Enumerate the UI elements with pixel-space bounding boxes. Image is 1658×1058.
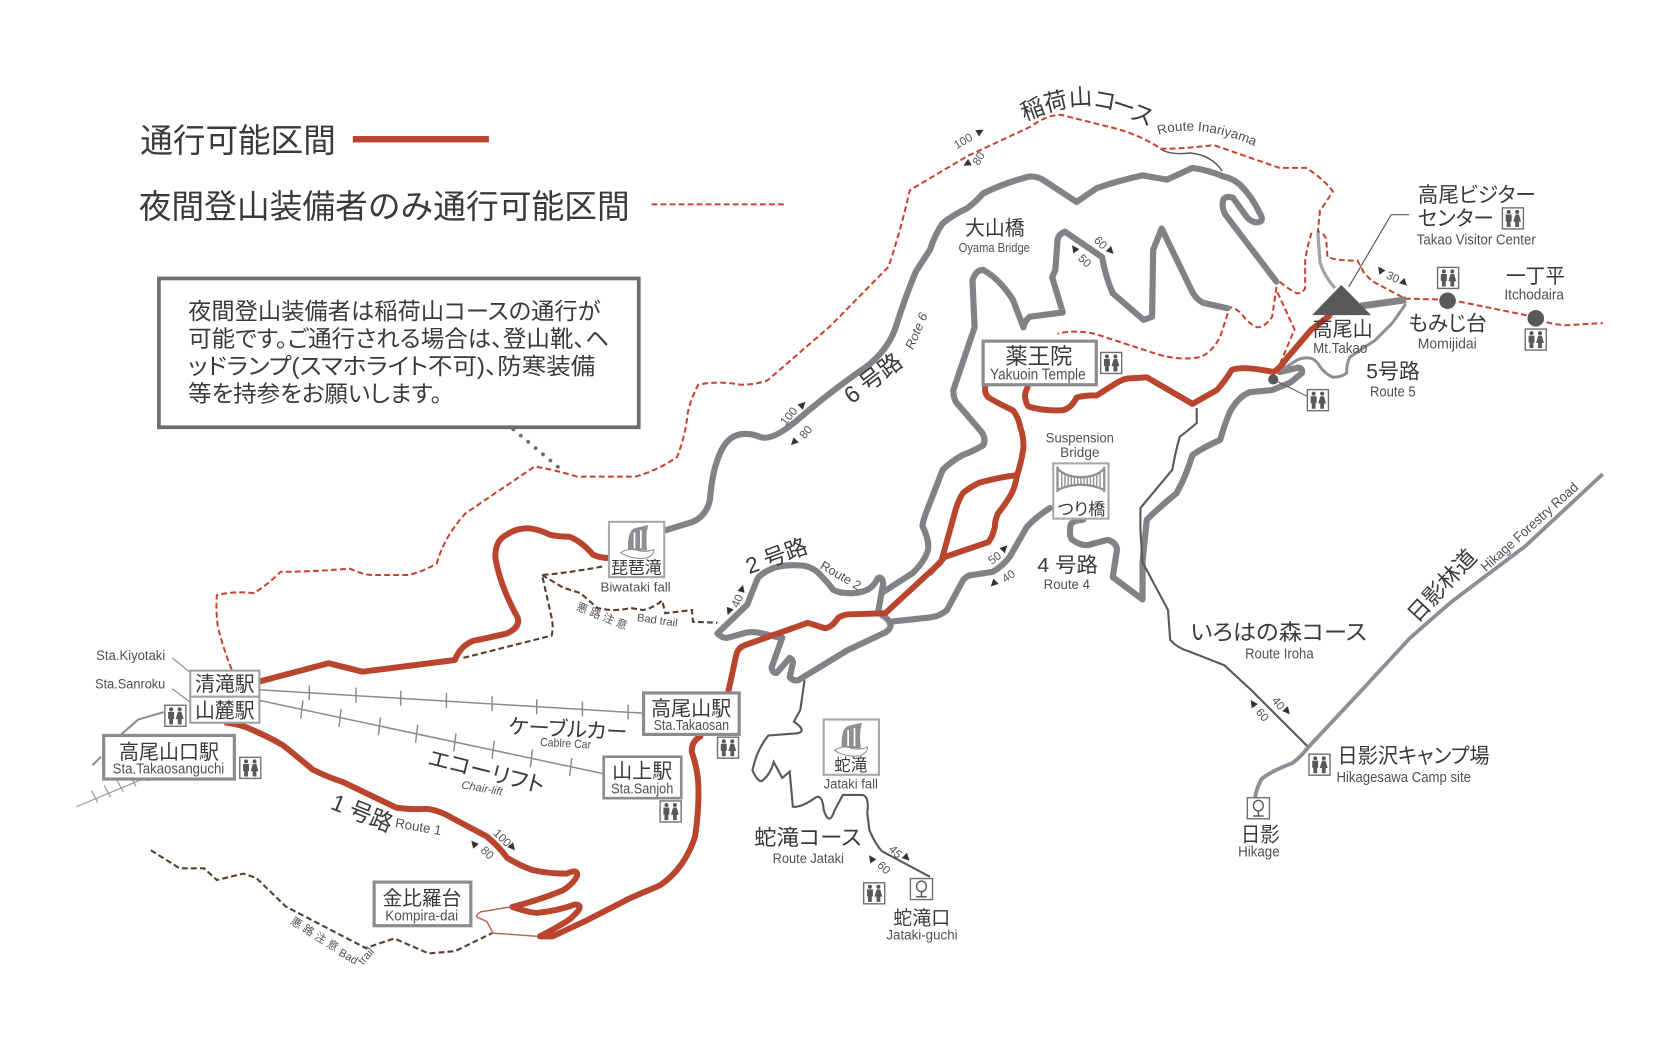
route: Route 5 thin gray — [1282, 305, 1405, 377]
label: Suspension Bridge: Suspension — [1046, 430, 1114, 446]
callout: notice box — [159, 278, 639, 469]
time markers: Oyama — [1069, 234, 1116, 271]
label: Jataki course — [754, 825, 861, 866]
label: Route 6 — [839, 310, 931, 409]
label: Jataki-guchi: 蛇滝口 — [893, 908, 950, 930]
time markers: Route 4: 40 — [1000, 567, 1018, 585]
callout: notice box: ッドランプ(スマホライト不可)、防寒装備 — [188, 353, 595, 379]
label: Hikagesawa camp site: 日影沢キャンプ場 — [1338, 744, 1490, 768]
route: Inariyama night-equipment dashed trail — [216, 115, 1603, 670]
time markers: 30: 30 — [1384, 269, 1402, 286]
icon: toilet at Hikagesawa — [1309, 754, 1330, 775]
icon: toilet near junction — [1307, 390, 1328, 411]
marker: junction toilet pointer — [1268, 374, 1307, 396]
waterfall box: Jataki: 蛇滝 — [834, 756, 867, 775]
route: Hikage forestry road — [1255, 474, 1603, 797]
time markers: Route 6: 80 — [797, 423, 816, 442]
waterfall box: Biwataki: 琵琶滝 — [611, 558, 662, 577]
time markers: Oyama: 50 — [1075, 252, 1094, 271]
station: Sanjoh: Sta.Sanjoh — [611, 781, 673, 797]
icon: toilet at Sanroku — [165, 705, 186, 726]
route: Route 4 gray trail — [891, 508, 1050, 622]
cable car line — [259, 686, 643, 720]
label: Jataki-guchi: Jataki-guchi — [886, 927, 958, 943]
label: Mt. Takao: Mt.Takao — [1313, 341, 1367, 357]
label: Route 2: Route 2 — [818, 558, 864, 593]
label: chair lift: Chair-lift — [461, 779, 504, 799]
time markers: Oyama: 60 — [1091, 234, 1110, 253]
label: Iroha course: いろはの森コース — [1190, 620, 1367, 645]
label: Iroha course — [1190, 620, 1367, 662]
label: bad trail lower: 悪 路 注 意 — [288, 914, 341, 954]
station: Sanjoh — [604, 757, 681, 798]
time markers: Jataki: 60 — [874, 859, 893, 878]
label: Hikage — [1238, 824, 1280, 861]
label: Hikagesawa camp site — [1336, 744, 1490, 786]
icon: toilet at Visitor Center — [1502, 208, 1523, 229]
route: bad trail dashed paths — [151, 566, 717, 953]
station: Takaosanguchi: Sta.Takaosanguchi — [113, 762, 224, 778]
station: Takaosan — [644, 693, 739, 734]
route: Jataki thin trail — [752, 680, 930, 877]
time markers: Inariyama: 80 — [970, 149, 988, 168]
label: Takao Visitor Center: センター — [1418, 206, 1494, 230]
station: Sanjoh: 山上駅 — [612, 760, 672, 783]
route: open Route 1 red — [226, 723, 700, 936]
label: Route 2 — [742, 534, 864, 593]
label: Route 4: Route 4 — [1044, 576, 1090, 592]
label: Hikage forestry road: 日影林道 — [1402, 545, 1482, 627]
label: Itchodaira: Itchodaira — [1504, 288, 1565, 304]
route: open red left fork — [942, 475, 1017, 560]
label: Hikagesawa camp site: Hikagesawa Camp site — [1336, 770, 1471, 786]
heading: Inariyama course: 山 — [1068, 84, 1093, 111]
label: Mt. Takao — [1313, 318, 1373, 357]
label: Jataki-guchi — [886, 908, 958, 943]
label: Route Inariyama — [1158, 131, 1256, 147]
label: Route 1: Route 1 — [394, 815, 443, 838]
label: bad trail lower: Bad — [336, 947, 360, 967]
route: open red Kiyotaki to Biwataki — [260, 528, 608, 681]
callout: notice box: 等を持参をお願いします。 — [188, 381, 442, 407]
route: open red from Takaosan to Yakuoin — [728, 562, 941, 693]
station: Yakuoin Temple: 薬王院 — [1005, 344, 1072, 369]
label: Itchodaira — [1504, 265, 1565, 304]
icon box: suspension bridge: つり橋 — [1058, 500, 1105, 519]
callout: notice box: 可能です。ご通行される場合は、登山靴、ヘ — [188, 325, 609, 351]
station: Takaosan: 高尾山駅 — [651, 697, 731, 720]
label: Route 5: Route 5 — [1370, 384, 1416, 400]
route: Mt. Takao to Momijidai thick gray — [1360, 300, 1406, 306]
label: chair lift: エコーリフト — [426, 745, 547, 798]
label: bad trail upper: 悪 路 注 意 — [574, 599, 630, 632]
time markers: 30 — [1375, 264, 1410, 288]
time markers: Route 4 — [986, 543, 1018, 589]
time markers: Jataki — [866, 843, 912, 878]
map infographic: Route Inariyama — [1157, 122, 1256, 146]
station: Yakuoin Temple — [983, 341, 1096, 385]
chair lift line — [259, 700, 604, 776]
label: Route 5 — [1366, 359, 1420, 400]
label: Sta.Sanroku: Sta.Sanroku — [95, 676, 165, 692]
icon: toilet at Takaosan station — [718, 737, 739, 758]
marker: Itchodaira — [1527, 310, 1544, 327]
label: Takao Visitor Center: Takao Visitor Center — [1417, 232, 1536, 248]
time markers: Route 4: 50 — [986, 549, 1004, 567]
time markers: Route 6 — [778, 399, 816, 448]
label: cable car: ケーブルカー — [508, 714, 628, 745]
route: Route 6 gray trail — [665, 168, 1276, 530]
station: Takaosanguchi: 高尾山口駅 — [119, 741, 219, 764]
label: Route 2: 2 号路 — [742, 534, 811, 579]
label: Itchodaira: 一丁平 — [1506, 265, 1565, 288]
icon: toilet at Jataki-guchi — [864, 883, 885, 904]
route: thin connector on Inariyama — [1161, 149, 1222, 171]
time markers: Route 1: 80 — [478, 844, 497, 863]
label: Hikage: Hikage — [1238, 845, 1280, 861]
heading: Inariyama course: 荷 — [1041, 86, 1070, 117]
label: Route 4: 4 号路 — [1037, 554, 1098, 577]
station: Kompira-dai: 金比羅台 — [383, 888, 461, 910]
time markers: Iroha: 40 — [1269, 694, 1288, 713]
label: Hikage forestry road: Hikage Forestry Road — [1477, 479, 1581, 575]
route: Oyama Bridge middle gray trail — [883, 229, 1228, 592]
label: cable car: Cablre Car — [540, 736, 592, 751]
heading: Inariyama course: ス — [1127, 98, 1158, 131]
route: lower gray loop — [772, 615, 891, 680]
heading: Inariyama course: 稲 — [1017, 93, 1048, 126]
label: Mt. Takao: 高尾山 — [1313, 318, 1373, 341]
icon: toilet at Takaosanguchi — [240, 757, 261, 778]
legend: night-equipped only section: 夜間登山装備者のみ通行可能区間 — [139, 188, 630, 225]
label: Momijidai: Momijidai — [1418, 337, 1477, 353]
icon: toilet at Yakuoin — [1101, 352, 1122, 373]
label: Momijidai: もみじ台 — [1408, 312, 1487, 336]
station: Kompira-dai — [374, 882, 471, 926]
label: Momijidai — [1408, 312, 1487, 353]
label: Hikage forestry road — [1402, 479, 1581, 627]
label: bad trail upper — [574, 599, 678, 632]
icon box: suspension bridge — [1053, 463, 1109, 519]
route: open red Yakuoin to summit — [1025, 316, 1330, 410]
label: Sta.Sanroku — [95, 676, 189, 701]
label: bad trail upper: Bad trail — [636, 612, 678, 630]
label: Iroha course: Route Iroha — [1245, 646, 1314, 662]
heading: Inariyama course: コ — [1091, 86, 1118, 115]
route: thin gray connector to Mt. Takao — [1318, 233, 1335, 288]
time markers: Iroha: 60 — [1253, 706, 1272, 725]
icon: bus stop Hikage — [1247, 798, 1269, 819]
station: Sanroku: 山麓駅 — [195, 699, 255, 722]
railway: Takaosanguchi tracks — [77, 769, 149, 807]
label: Jataki fall: Jataki fall — [824, 776, 878, 792]
time markers: Route 6: 100 — [778, 404, 801, 428]
label: Biwataki fall: Biwataki fall — [600, 579, 671, 594]
station: Takaosan: Sta.Takaosan — [654, 718, 729, 734]
route: Iroha thin trail — [1140, 408, 1308, 747]
label: Oyama Bridge — [959, 217, 1030, 255]
icon: Mt. Takao summit triangle — [1312, 285, 1371, 315]
route: thin gray from station toward Takaosanguchi — [92, 712, 164, 765]
route: thin red to Kompira-dai — [477, 907, 537, 936]
station: Takaosanguchi — [104, 735, 234, 779]
station: Kiyotaki: 清滝駅 — [195, 673, 255, 696]
icon: toilet at Momijidai — [1438, 267, 1459, 288]
marker: Momijidai — [1439, 292, 1456, 309]
label: Route 1: 1 号路 — [328, 789, 397, 837]
time markers: Iroha — [1248, 694, 1293, 725]
icon: toilet at Sanjoh — [660, 801, 681, 822]
label: Route 4 — [1037, 554, 1098, 592]
legend: passable section: 通行可能区間 — [140, 122, 336, 159]
label: Sta.Kiyotaki — [96, 647, 189, 672]
label: Oyama Bridge: Oyama Bridge — [959, 240, 1030, 255]
time markers: Jataki: 45 — [886, 843, 905, 862]
route: Route 4 gray trail east — [1070, 368, 1302, 599]
icon: bus stop Jataki-guchi — [910, 879, 933, 900]
label: Hikage: 日影 — [1241, 824, 1280, 847]
label: Oyama Bridge: 大山橋 — [965, 217, 1025, 240]
label: bad trail lower: trail — [356, 946, 377, 967]
label: Route 6: Rote 6 — [902, 310, 931, 351]
leader: Visitor Center — [1349, 215, 1409, 287]
time markers: Inariyama — [952, 126, 988, 169]
label: Route 6: 6 号路 — [839, 348, 907, 409]
callout: notice box: 夜間登山装備者は稲荷山コースの通行が — [188, 298, 601, 324]
label: Takao Visitor Center — [1417, 183, 1536, 248]
heading: Inariyama course — [1017, 84, 1158, 131]
label: Jataki course: Route Jataki — [773, 850, 844, 866]
time markers: Route 2 — [724, 584, 747, 616]
station: Kompira-dai: Kompira-dai — [385, 908, 458, 924]
label: Suspension Bridge — [1046, 430, 1114, 460]
label: Takao Visitor Center: 高尾ビジター — [1418, 183, 1536, 207]
label: bad trail lower — [288, 914, 377, 967]
route: open red right fork — [930, 387, 1023, 573]
label: Jataki course: 蛇滝コース — [754, 825, 861, 850]
route: Route 2 gray trail — [717, 565, 883, 638]
label: Sta.Kiyotaki: Sta.Kiyotaki — [96, 647, 165, 663]
time markers: Route 1 — [468, 827, 518, 863]
waterfall box: Biwataki — [609, 522, 664, 577]
legend: passable section — [140, 122, 489, 159]
time markers: Route 1: 100 — [491, 827, 514, 850]
time markers: Route 2: 40 — [729, 592, 746, 610]
waterfall box: Jataki — [824, 720, 879, 775]
icon: toilet at Itchodaira — [1525, 329, 1546, 350]
label: Route 5: 5号路 — [1366, 359, 1420, 383]
station: Yakuoin Temple: Yakuoin Temple — [990, 366, 1086, 383]
time markers: Inariyama: 100 — [952, 131, 975, 152]
label: Suspension Bridge: Bridge — [1060, 444, 1100, 460]
label: Route 1 — [328, 789, 443, 838]
heading: Inariyama course: ー — [1109, 90, 1139, 122]
